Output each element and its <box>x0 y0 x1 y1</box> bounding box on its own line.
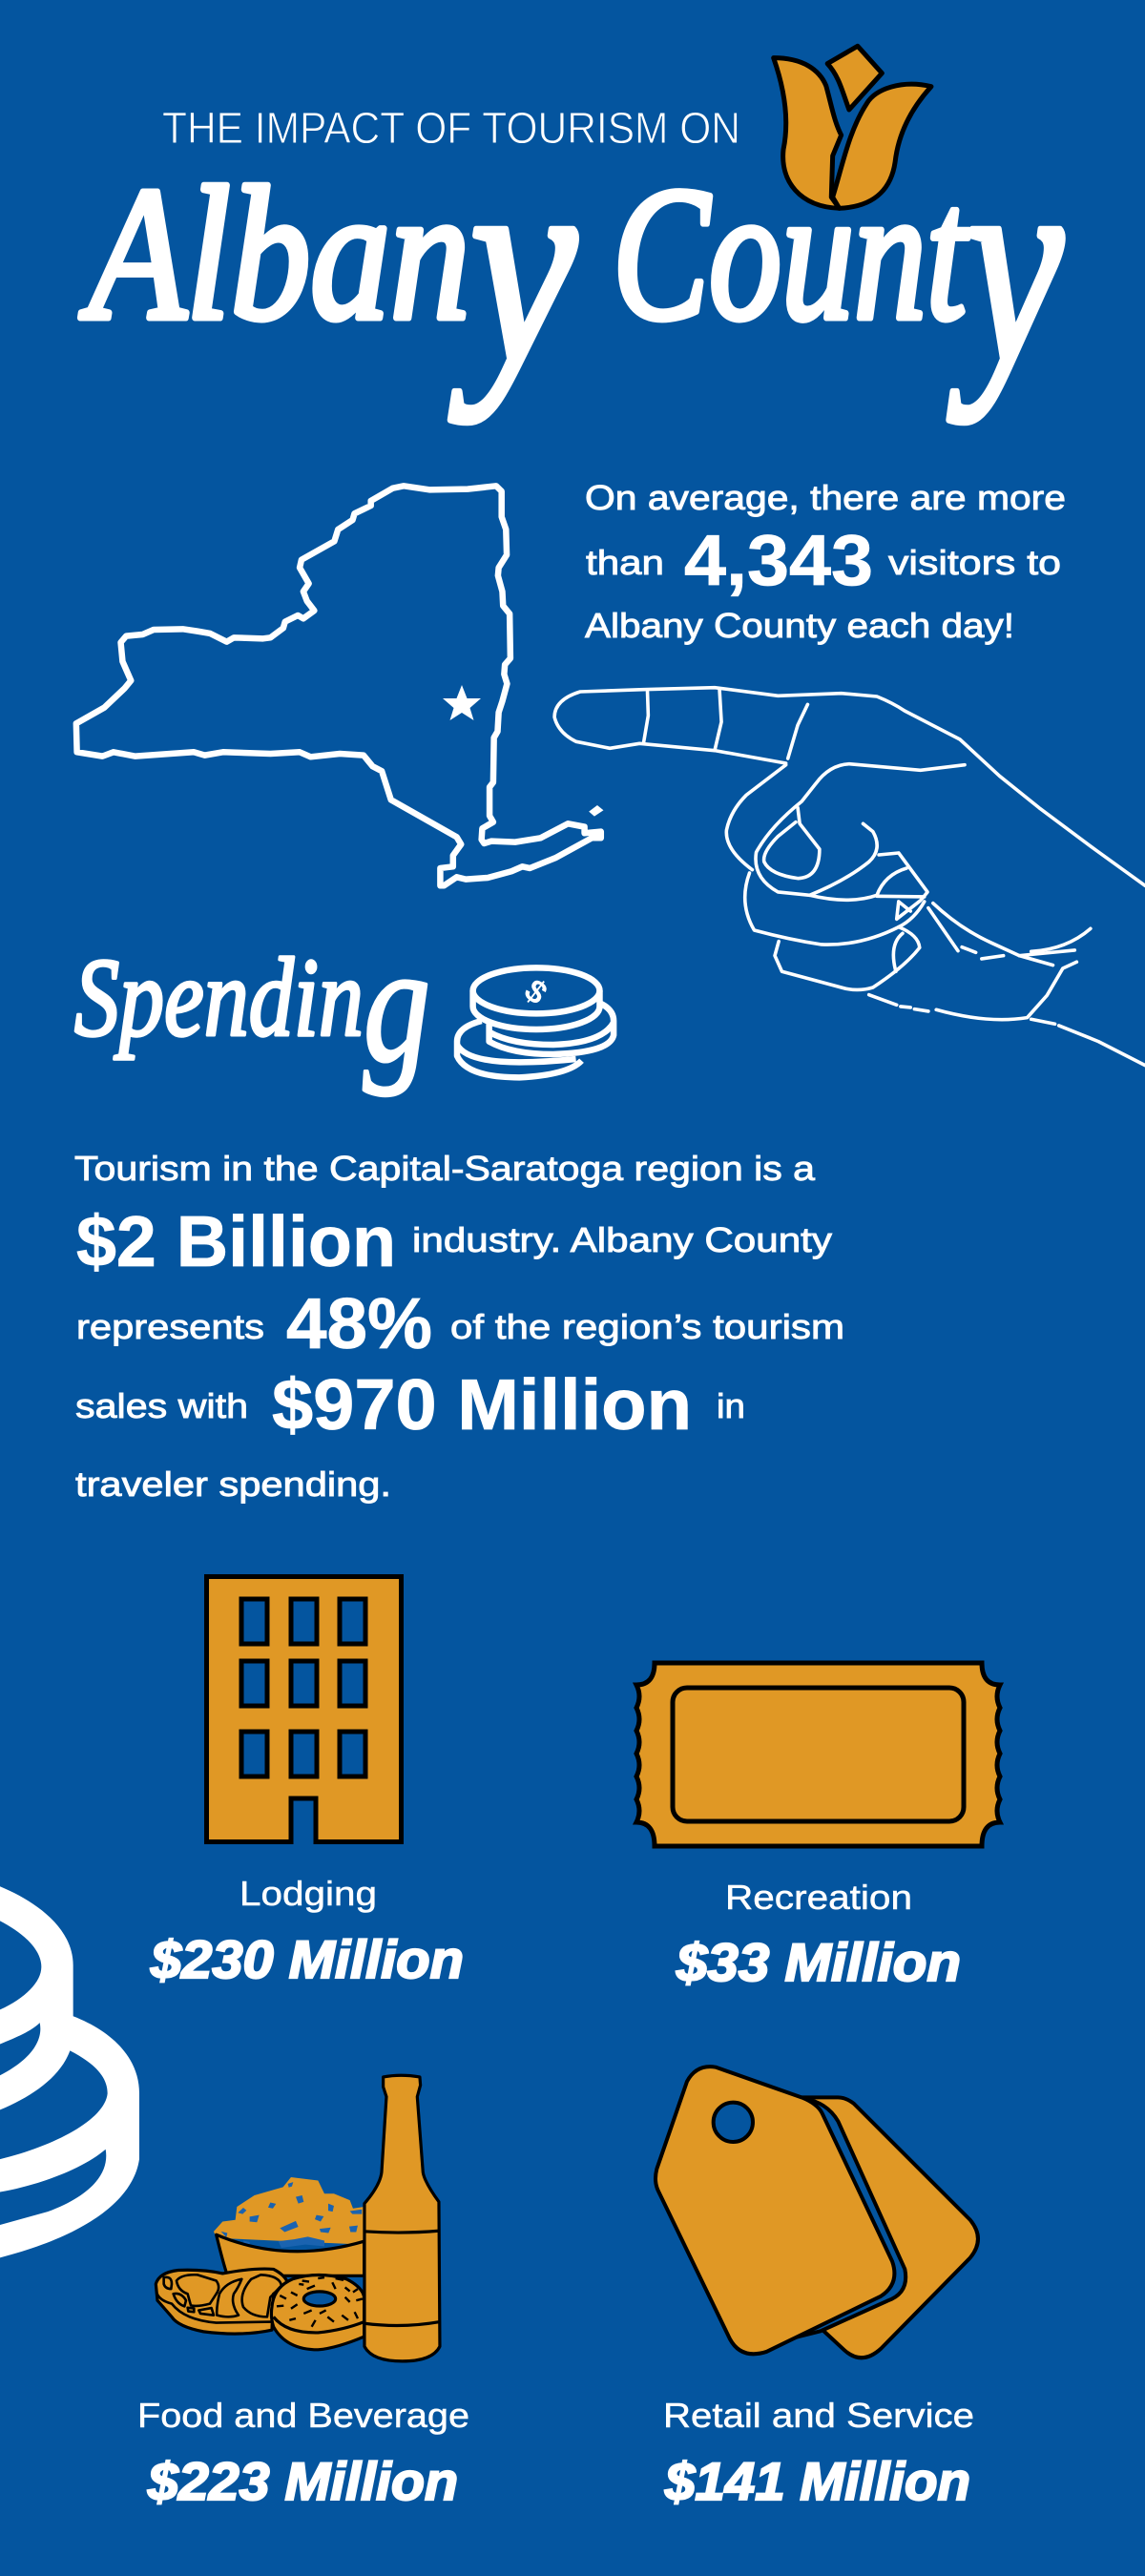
intro text: daily visitors: visitors to <box>888 543 1061 582</box>
stat: lodging: $230 Million <box>150 1929 464 1989</box>
stat: food and beverage: $223 Million <box>147 2451 458 2511</box>
stat: recreation <box>676 1878 961 1992</box>
paragraph: spending summary: sales with <box>75 1386 248 1425</box>
paragraph: spending summary <box>74 1149 844 1504</box>
stat: retail and service: Retail and Service <box>663 2396 974 2435</box>
intro text: daily visitors: On average, there are more <box>585 478 1066 517</box>
intro text: daily visitors <box>585 478 1066 645</box>
subtitle: the impact of tourism on: THE IMPACT OF TOURISM ON <box>162 103 740 153</box>
decorative large coins at left edge <box>0 1886 139 2257</box>
icon: stack of coins <box>457 967 614 1077</box>
title: Albany County: Alban <box>89 149 545 360</box>
stat: lodging: Lodging <box>239 1874 377 1913</box>
stat: lodging <box>150 1874 464 1989</box>
icon: star marking Albany <box>443 685 481 720</box>
paragraph: spending summary: Tourism in the Capital-Saratoga region is a <box>74 1149 816 1188</box>
stat: retail and service <box>663 2396 974 2511</box>
paragraph: spending summary: $2 Billion <box>76 1201 396 1281</box>
icon: ticket <box>636 1663 1000 1846</box>
title: Albany County: y <box>947 106 1065 424</box>
icon: food and beverage <box>156 2075 440 2361</box>
paragraph: spending summary: represents <box>76 1307 264 1346</box>
paragraph: spending summary: of the region’s tourism <box>450 1307 844 1346</box>
title: Albany County <box>80 106 1065 424</box>
title: Albany County: y <box>448 106 578 424</box>
title: Albany County: Count <box>613 149 1079 360</box>
stat: recreation: Recreation <box>725 1878 912 1917</box>
icon: tulip <box>774 46 931 208</box>
icon: price tags <box>656 2067 978 2358</box>
map: New York State outline <box>76 486 603 885</box>
icon: hotel building <box>206 1576 401 1841</box>
intro text: daily visitors: Albany County each day! <box>585 606 1014 645</box>
paragraph: spending summary: in <box>717 1386 745 1425</box>
paragraph: spending summary: industry. Albany County <box>412 1220 833 1259</box>
stat: food and beverage: Food and Beverage <box>137 2396 469 2435</box>
stat: food and beverage <box>137 2396 469 2511</box>
heading: Spending: g <box>364 911 430 1097</box>
icon: stack of coins: $ <box>517 972 554 1012</box>
paragraph: spending summary: $970 Million <box>272 1364 692 1444</box>
illustration: pointing hand <box>554 688 1145 1066</box>
paragraph: spending summary: traveler spending. <box>75 1465 391 1504</box>
heading: Spending: Spendin <box>74 935 437 1060</box>
stat: recreation: $33 Million <box>676 1932 961 1992</box>
intro text: daily visitors: than <box>586 543 664 582</box>
paragraph: spending summary: 48% <box>286 1283 432 1363</box>
intro text: daily visitors: 4,343 <box>684 520 873 600</box>
stat: retail and service: $141 Million <box>664 2451 970 2511</box>
